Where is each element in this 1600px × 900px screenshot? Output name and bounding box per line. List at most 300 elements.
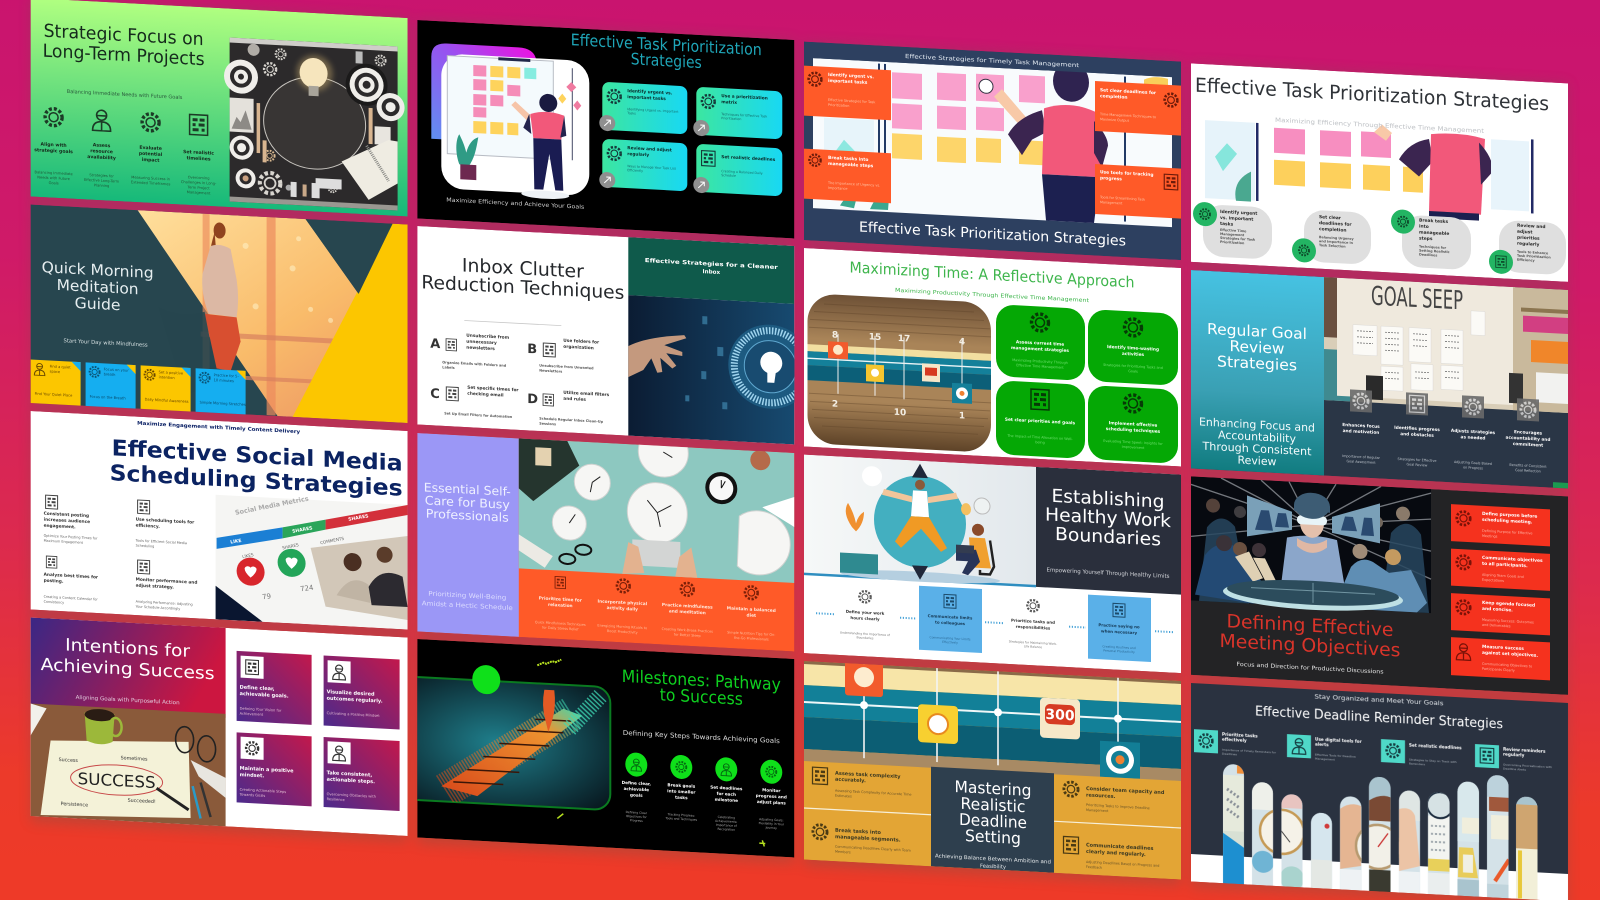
item D: Sessions xyxy=(539,421,556,426)
title: Scheduling Strategies xyxy=(110,461,403,502)
item B: Unsubscribe from Unwanted xyxy=(539,363,594,370)
card: positive mindset: Towards Goals xyxy=(239,793,265,798)
red card: keep agenda xyxy=(1451,593,1550,635)
step descriptions: Challenges in Long- xyxy=(181,180,217,186)
title: Guide xyxy=(75,294,121,314)
orange step: diet: diet xyxy=(747,612,756,619)
step labels: Assess xyxy=(93,142,111,149)
step: prioritize: Strategies for Maintaining Work- xyxy=(1009,639,1057,646)
title: to Success xyxy=(660,685,743,710)
card: breath: breath xyxy=(104,372,115,377)
card: intention xyxy=(141,365,191,412)
red card: define purpose: Defining Purpose for Effective xyxy=(1482,529,1532,535)
pod: clear deadlines: completion xyxy=(1319,226,1347,234)
step: monitor xyxy=(756,759,787,831)
image: timeline on wood: 2 xyxy=(832,399,838,410)
step: smaller tasks: Tools and Techniques xyxy=(664,816,698,822)
orange step: mindfulness: Creating Work-Break Practices xyxy=(662,627,713,634)
pod: break tasks: Break tasks xyxy=(1419,217,1448,225)
pod: break tasks: into xyxy=(1419,223,1429,230)
card: realistic deadlines xyxy=(693,144,782,197)
blue card: communicate xyxy=(919,586,982,653)
header gradient xyxy=(31,618,226,718)
header text: Effective Strategies for a Cleaner xyxy=(645,258,778,271)
card: positive mindset: Creating Actionable Steps xyxy=(240,788,286,794)
step descriptions: Needs with Future xyxy=(37,175,71,181)
item: communicate deadlines: clearly and regularly. xyxy=(1086,849,1146,858)
step labels xyxy=(1342,420,1550,449)
item B: Use folders for xyxy=(563,338,600,346)
step: communicate limits: to colleagues xyxy=(935,620,966,626)
top caption: Effective Strategies for Timely Task Management xyxy=(905,54,1080,69)
item: assess complexity: Assessing Task Complexity for Accurate Time xyxy=(835,789,912,797)
image: social media metrics dashboard: LIKE xyxy=(230,538,242,546)
card: scheduling xyxy=(1088,385,1178,464)
card: practice: 10 minutes xyxy=(214,378,234,383)
panel: Effective Task Prioritization Strategies black slide xyxy=(417,20,794,238)
image: goal whiteboard and shelves: GOAL SEEP xyxy=(1371,282,1463,316)
callout: identify urgent: Effective Strategies for Task xyxy=(828,98,875,104)
panel: Strategic Focus on Long-Term Projects slide xyxy=(31,0,408,216)
card: review and adjust: regularly xyxy=(627,151,649,158)
pod: break tasks: steps xyxy=(1419,235,1433,242)
step labels: resource xyxy=(90,148,113,155)
card: positive mindset: Maintain a positive xyxy=(240,766,294,774)
image: social media metrics dashboard: LIKES xyxy=(242,552,254,559)
card: practice xyxy=(196,368,246,415)
title: Inbox Clutter xyxy=(462,255,584,283)
callout: break tasks: manageable steps xyxy=(828,161,874,169)
step: saying no: Creating Routines and xyxy=(1102,644,1136,650)
pod: identify urgent: Management xyxy=(1220,232,1245,237)
image: futuristic meeting xyxy=(1191,476,1431,616)
callout: clear deadlines: completion xyxy=(1100,93,1128,101)
subtitle: Focus and Direction for Productive Discussions xyxy=(1237,662,1384,676)
dotted arrows xyxy=(816,613,1173,632)
item B: B xyxy=(527,342,537,357)
item: digital tools xyxy=(1287,734,1363,763)
pod: break tasks: Setting Realistic xyxy=(1419,248,1450,254)
item: monitor performance: adjust strategy. xyxy=(136,583,174,591)
card: prioritization matrix xyxy=(693,87,782,140)
step labels xyxy=(34,142,214,162)
image: timeline band xyxy=(804,657,1181,785)
image: success notebook and coffee: Succeeded! xyxy=(128,798,156,805)
pod: review priorities: Task Prioritization xyxy=(1517,254,1551,259)
orange step: relaxation: Quick Mindfulness Techniques xyxy=(535,620,586,627)
callout: clear deadlines: Maximize Output xyxy=(1100,117,1130,123)
card: realistic deadlines: Creating a Balanced Daily xyxy=(721,169,763,175)
step labels: timelines xyxy=(187,155,211,163)
title: Effective Task Prioritization xyxy=(571,30,762,59)
image: social media metrics dashboard xyxy=(216,490,408,629)
step labels: availability xyxy=(87,154,116,162)
item: break tasks: Communicating Deadlines Clearly with Team xyxy=(835,845,912,853)
item: digital tools: Management xyxy=(1315,757,1336,762)
step descriptions: Goal Assessment xyxy=(1346,459,1376,465)
panel: Timely Task Management slide xyxy=(804,42,1181,260)
image: social media metrics dashboard: 79 xyxy=(262,592,272,601)
image: social media metrics dashboard: COMMENTS xyxy=(320,536,345,545)
callout: tracking tools xyxy=(1095,164,1181,219)
item D xyxy=(527,388,610,429)
card: time-wasting: Strategies for Prioritizing Tasks and xyxy=(1103,363,1163,370)
step: work hours: Boundaries xyxy=(857,635,874,640)
step labels: Encourages xyxy=(1514,429,1542,437)
pod: clear deadlines: and Importance in xyxy=(1319,239,1354,245)
pod: identify urgent: Prioritization xyxy=(1220,240,1245,245)
subtitle: Defining Key Steps Towards Achieving Goals xyxy=(623,729,780,745)
item: realistic deadlines: Strategies to Stay on Track with xyxy=(1409,758,1457,764)
step: communicate limits: Communicating Your Limits xyxy=(929,635,971,641)
item: communicate deadlines xyxy=(1064,836,1159,873)
item B: Newsletters xyxy=(539,368,562,374)
item: team capacity: Consider team capacity and xyxy=(1086,786,1165,796)
item: team capacity xyxy=(1064,782,1165,816)
card: identify urgent: Identify urgent vs. xyxy=(627,88,673,97)
card: consistent steps: Resilience xyxy=(327,797,345,802)
step: work hours: Understanding the Importance of xyxy=(840,631,891,637)
pod: identify urgent: Strategies for Task xyxy=(1220,236,1256,242)
image: lightbulb and targets xyxy=(224,37,405,211)
orange step: physical activity: Boost Productivity xyxy=(607,629,638,635)
item: consistent posting xyxy=(44,495,98,546)
title: Care for Busy xyxy=(425,493,510,512)
card: positive mindset: mindset. xyxy=(240,772,264,779)
red card: measure success: Communicating Objectives to xyxy=(1482,662,1532,668)
step descriptions: Management xyxy=(187,190,211,196)
image strips: clocks and office xyxy=(1211,754,1551,900)
image: social media metrics dashboard: Social Media Metrics xyxy=(234,495,310,517)
title: Defining Effective xyxy=(1227,611,1394,641)
image: timeline on wood: 10 xyxy=(894,408,906,418)
item: best times xyxy=(44,556,99,607)
item C: checking email xyxy=(467,391,504,399)
title: Intentions for xyxy=(65,635,190,662)
step: deadlines: Importance of xyxy=(716,823,738,828)
illustration: sticky notes xyxy=(1205,115,1534,224)
orange step: mindfulness: for Better Sleep xyxy=(674,633,701,638)
callout: break tasks: Break tasks into xyxy=(828,155,868,163)
red card: measure success: Measure success xyxy=(1482,644,1524,652)
orange step: physical activity: activity daily xyxy=(607,605,638,613)
red card: measure success xyxy=(1451,637,1550,680)
image: timeline band: 300 xyxy=(1045,707,1075,724)
subtitle: Through Consistent xyxy=(1201,440,1312,458)
item: communicate deadlines: Feedback xyxy=(1086,865,1102,870)
card: identify urgent: Identifying Urgent vs. Important xyxy=(627,107,679,114)
item A: Labels xyxy=(442,365,455,370)
pod: identify urgent: tasks xyxy=(1220,221,1234,228)
orange step: diet: Maintain a balanced xyxy=(727,605,776,614)
icon row xyxy=(45,107,208,136)
title: Effective Deadline Reminder Strategies xyxy=(1255,703,1503,733)
step: monitor: Flexibility in Your xyxy=(759,821,785,826)
step labels: impact xyxy=(142,157,160,164)
image: timeline on wood: 17 xyxy=(898,334,910,345)
dark title panel xyxy=(1036,467,1181,595)
orange step: relaxation: relaxation xyxy=(548,602,573,609)
red card: define purpose: Define purpose before xyxy=(1482,511,1537,520)
orange step: diet: the-Go Professionals xyxy=(734,636,769,642)
panel: Essential Self-Care slide xyxy=(417,414,794,651)
title: Essential Self- xyxy=(424,480,511,499)
step labels: Align with xyxy=(41,142,67,149)
callout: break tasks xyxy=(804,149,891,203)
callout: break tasks: The Importance of Urgency vs. xyxy=(827,181,880,188)
step labels: potential xyxy=(139,151,163,158)
panel: Effective Deadline Reminder slide xyxy=(1191,683,1568,900)
panel: Regular Goal Review slide xyxy=(1191,270,1568,489)
step descriptions: Planning xyxy=(94,183,109,188)
step labels: and obstacles xyxy=(1400,431,1434,439)
subtitle: Aligning Goals with Purposeful Action xyxy=(76,695,180,706)
card: identify urgent xyxy=(599,82,687,135)
image: social media metrics dashboard: SHARES xyxy=(292,525,313,535)
item: prioritize tasks: Prioritize tasks xyxy=(1222,732,1258,739)
step: smaller tasks: Tracking Progress: xyxy=(667,812,695,818)
item C: Set specific times for xyxy=(467,385,519,393)
step: clear goals: Define clear, xyxy=(622,780,651,786)
item C: Set Up Email Filters for Automation xyxy=(444,411,513,419)
step: smaller tasks xyxy=(664,754,698,822)
item: break tasks: Break tasks into xyxy=(835,828,882,836)
callout: identify urgent xyxy=(804,66,891,120)
step: deadlines: Recognition xyxy=(717,827,735,832)
step: saying no: Personal Productivity xyxy=(1103,648,1135,654)
item: assess complexity: Estimates xyxy=(835,794,852,799)
step descriptions: Goals xyxy=(49,181,59,185)
image: timeline on wood: 8 xyxy=(832,330,838,341)
card: time-wasting: Goals xyxy=(1128,369,1138,374)
orange step: diet: Simple Nutrition Tips for On- xyxy=(727,630,776,637)
card: realistic deadlines: Set realistic deadlines xyxy=(721,154,776,163)
card: clear goals xyxy=(237,651,312,725)
card: assess xyxy=(996,304,1085,381)
card: quiet space: Find a quiet xyxy=(50,365,71,370)
card: review and adjust xyxy=(599,139,687,192)
orange step: relaxation: for Daily Stress Relief xyxy=(542,626,579,632)
card: scheduling: Evaluating Time Spent: Insights for xyxy=(1103,439,1163,446)
item B: organization xyxy=(563,344,594,351)
step descriptions: Extended Timeframes xyxy=(131,180,170,186)
title: Strategic Focus on xyxy=(44,21,204,50)
title: Quick Morning xyxy=(42,258,154,282)
title: Professionals xyxy=(426,506,509,525)
callout: break tasks: Importance xyxy=(828,186,847,191)
card: consistent steps: Take consistent, xyxy=(327,770,372,779)
step labels: Set realistic xyxy=(183,149,214,157)
card: quiet space: space xyxy=(50,370,61,374)
card: assess: management strategies xyxy=(1011,345,1069,354)
callout: tracking tools: Use tools for tracking xyxy=(1100,169,1154,178)
header band xyxy=(628,237,794,304)
step: smaller tasks: Break goals xyxy=(667,782,696,789)
red card: communicate objectives: to all participants. xyxy=(1482,561,1528,569)
item: team capacity: Management xyxy=(1086,808,1109,813)
step labels: accountability and xyxy=(1506,435,1550,443)
subtitle: Accountability xyxy=(1218,428,1296,446)
item C: C xyxy=(430,387,440,402)
image: social media metrics dashboard: 724 xyxy=(300,584,315,593)
item: prioritize tasks: Deadlines xyxy=(1222,752,1237,756)
pod: break tasks: Techniques for xyxy=(1419,244,1447,250)
title: Achieving Success xyxy=(41,655,215,684)
pod: review priorities: priorities xyxy=(1517,235,1540,242)
item A xyxy=(430,331,510,373)
card: visualize xyxy=(324,656,400,730)
item: team capacity: resources. xyxy=(1086,792,1116,800)
item: break tasks: manageable segments. xyxy=(835,834,901,844)
card: review and adjust: Review and adjust xyxy=(627,145,672,153)
item: best times: Creating a Content Calendar for xyxy=(44,595,98,602)
card: positive mindset xyxy=(237,732,312,806)
card: visualize: outcomes regularly. xyxy=(327,696,383,705)
step labels: Evaluate xyxy=(139,145,162,152)
image: woman in sunrise xyxy=(138,210,408,423)
icon row xyxy=(1350,389,1539,421)
callout: tracking tools: Tools for Streamlining Task xyxy=(1099,195,1145,202)
card: clear goals: Defining Your Vision for xyxy=(240,707,282,713)
item: assess complexity: Assess task complexity xyxy=(835,771,901,780)
red card: keep agenda: Keep agenda focused xyxy=(1482,600,1535,609)
red card: define purpose xyxy=(1451,504,1550,546)
orange step: mindfulness: and meditation xyxy=(669,608,706,616)
item: monitor performance: Analyzing Performance: Adjusting xyxy=(136,600,193,607)
teal corner triangle xyxy=(306,219,393,296)
card: intention: Set a positive xyxy=(159,370,184,376)
pod: clear deadlines: Balancing Urgency xyxy=(1319,235,1355,241)
item A: newsletters xyxy=(466,345,495,352)
step descriptions: Importance of Regular xyxy=(1342,454,1381,460)
step descriptions: Adjusting Goals Based xyxy=(1454,460,1492,466)
step: clear goals: Progress xyxy=(630,818,643,823)
item: assess complexity: accurately. xyxy=(835,777,866,784)
card: consistent steps: actionable steps. xyxy=(327,777,375,785)
orange step: relaxation: Prioritize time for xyxy=(539,595,583,604)
image: social media metrics dashboard: SHARES xyxy=(282,542,300,550)
orange step: relaxation xyxy=(535,575,586,632)
blue card: saying no xyxy=(1088,595,1151,662)
accent xyxy=(1553,482,1568,489)
callout: identify urgent: Identify urgent vs. xyxy=(828,72,874,80)
card: breath xyxy=(86,362,136,409)
pod: review priorities xyxy=(1489,219,1566,277)
step: monitor: adjust plans xyxy=(757,799,786,806)
item: scheduling tools: Tools for Efficient Social Media xyxy=(135,539,187,545)
panel: Healthy Work Boundaries slide xyxy=(804,455,1181,673)
callout: tracking tools: Management xyxy=(1100,200,1123,206)
item: consistent posting: increases audience xyxy=(44,517,90,525)
subtitle: Review xyxy=(1237,453,1276,469)
yellow corner triangle xyxy=(293,218,408,423)
card: consistent steps: Overcoming Obstacles with xyxy=(327,792,376,799)
image: hand touching digital interface xyxy=(628,295,812,445)
red card: communicate objectives: Expectations xyxy=(1482,578,1504,583)
item: realistic deadlines: Set realistic deadlines xyxy=(1409,743,1462,750)
title: Maximizing Time: A Reflective Approach xyxy=(850,258,1135,292)
item A: Organize Emails with Folders and xyxy=(442,360,507,368)
image: clocks on teal desk xyxy=(519,419,794,583)
title: Establishing xyxy=(1052,486,1164,513)
step labels: Enhances focus xyxy=(1342,422,1380,430)
card: consistent steps xyxy=(324,737,400,811)
step descriptions xyxy=(1342,454,1547,474)
item: consistent posting: Optimize Your Posting Times for xyxy=(44,534,98,541)
orange step: mindfulness: Practice mindfulness xyxy=(662,602,713,611)
item: monitor performance: Your Schedule Accordingly xyxy=(136,605,180,611)
item D: Utilize email filters xyxy=(563,390,610,398)
decoration: sparkles xyxy=(557,813,765,846)
item: prioritize tasks xyxy=(1194,729,1277,759)
step labels: and motivation xyxy=(1343,428,1379,436)
item: communicate deadlines: Adjusting Deadlines Based on Progress and xyxy=(1086,860,1159,868)
step: monitor: Journey xyxy=(765,825,777,830)
item: scheduling tools: Use scheduling tools for xyxy=(136,517,195,526)
image: success notebook and coffee: Success xyxy=(59,757,78,764)
step descriptions: Measuring Success in xyxy=(131,175,170,181)
step: clear goals: achievable xyxy=(624,786,649,792)
step: work hours: Define your work xyxy=(846,609,885,616)
card: time-wasting xyxy=(1088,309,1178,386)
pod: clear deadlines: Task Selection xyxy=(1319,243,1346,249)
item: review reminders: regularly xyxy=(1503,752,1525,758)
card: assess: Assess current time xyxy=(1016,339,1064,348)
pod: identify urgent: Effective Time xyxy=(1220,228,1247,233)
orange step: physical activity xyxy=(597,578,648,635)
step: deadlines: Celebrating xyxy=(718,815,735,820)
callout: identify urgent: important tasks xyxy=(828,78,868,86)
image: social media metrics dashboard: SHARES xyxy=(348,513,369,523)
step: deadlines: Achievements: xyxy=(715,819,737,824)
step labels: as needed xyxy=(1461,434,1485,442)
card: identify urgent: Tasks xyxy=(626,111,636,116)
item: monitor performance xyxy=(136,560,197,612)
item: scheduling tools: Scheduling xyxy=(136,544,154,549)
step: deadlines: Set deadlines xyxy=(710,785,743,791)
card: clear goals: achievable goals. xyxy=(240,691,289,700)
title: Reduction Techniques xyxy=(421,272,624,304)
title: Strategies xyxy=(631,49,702,72)
center title panel xyxy=(931,767,1054,873)
subtitle: Feasibility xyxy=(980,863,1006,871)
red card: keep agenda: and concise. xyxy=(1482,606,1513,613)
card: prioritization matrix: Techniques for Effective Task xyxy=(720,112,767,119)
pod: clear deadlines xyxy=(1292,209,1371,266)
red card: measure success: against set objectives. xyxy=(1482,650,1538,659)
item A: unnecessary xyxy=(466,339,497,346)
illustration: person at task board xyxy=(431,43,589,201)
pod: break tasks: manageable xyxy=(1419,229,1449,237)
amber panel xyxy=(804,761,1181,879)
image: success notebook and coffee: Sometimes xyxy=(121,755,148,763)
step: clear goals: Defining Clear xyxy=(626,810,648,815)
title: Deadline xyxy=(959,810,1027,832)
item: assess complexity xyxy=(812,767,912,802)
step: prioritize: Prioritize tasks and xyxy=(1011,618,1055,625)
header text: Inbox xyxy=(703,269,720,276)
card: quiet space xyxy=(31,360,81,406)
step descriptions: Term Project xyxy=(187,185,210,191)
card: priorities xyxy=(996,380,1085,459)
subtitle: Achieving Balance Between Ambition and xyxy=(935,853,1051,866)
step labels: commitment xyxy=(1513,441,1543,449)
caption: Maximize Efficiency and Achieve Your Goals xyxy=(446,198,584,211)
card: prioritization matrix: matrix xyxy=(721,99,737,106)
image: timeline on wood: 15 xyxy=(869,332,881,343)
item B xyxy=(527,336,600,376)
step: saying no xyxy=(1098,603,1140,654)
